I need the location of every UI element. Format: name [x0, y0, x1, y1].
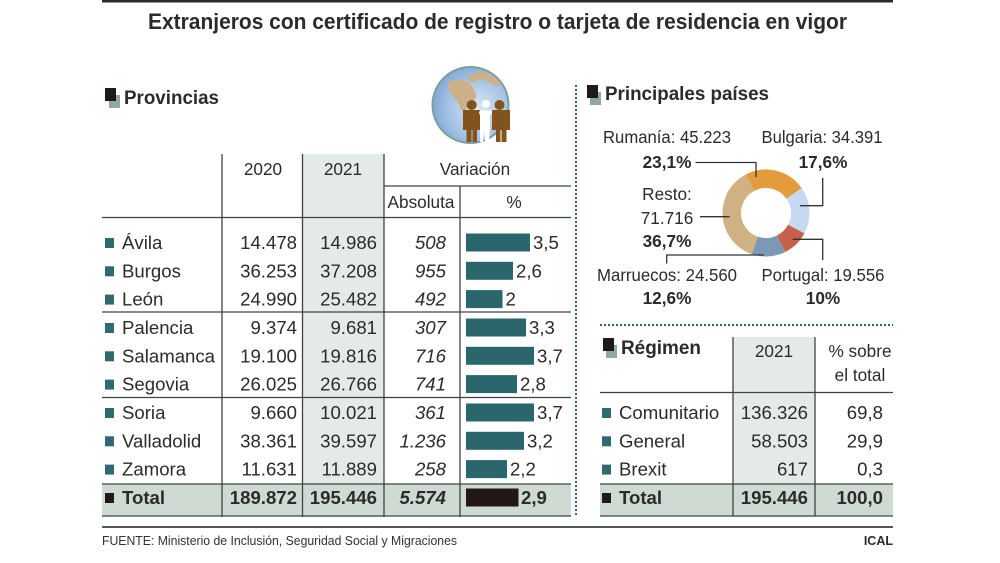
title: Extranjeros con certificado de registro o tarjeta de residencia en vigor — [148, 9, 847, 34]
row: Palencia — [105, 317, 555, 338]
row: Comunitario: 69,8 — [847, 402, 883, 423]
row: Soria: Soria — [122, 402, 166, 423]
row: Total: 189.872 — [230, 487, 297, 508]
row: Salamanca: 19.100 — [240, 345, 297, 366]
row: Brexit: 0,3 — [857, 459, 883, 480]
table header: Variación — [440, 159, 510, 179]
leader lines — [667, 162, 823, 264]
row: Total: 195.446 — [310, 487, 377, 508]
table: provincias — [102, 154, 571, 517]
row: León: 25.482 — [320, 289, 377, 310]
label: Resto: Resto: — [642, 184, 692, 204]
label: Bulgaria: 17,6% — [799, 152, 847, 172]
label: Rumanía: 23,1% — [643, 152, 691, 172]
row: Brexit: Brexit — [619, 459, 667, 480]
row: Soria: 10.021 — [320, 402, 377, 423]
row: Salamanca: 3,7 — [537, 345, 563, 366]
label: Resto: 36,7% — [643, 231, 691, 251]
table header: 2021 — [324, 159, 362, 179]
row: Soria: 361 — [415, 402, 446, 423]
row: Total: Total — [122, 487, 165, 508]
row: Ávila: 14.478 — [240, 232, 297, 253]
row: Segovia: 26.766 — [320, 374, 377, 395]
table header: Absoluta — [388, 192, 455, 212]
row: Salamanca: Salamanca — [122, 345, 216, 366]
row: Comunitario — [602, 402, 883, 423]
row: General: 29,9 — [847, 430, 883, 451]
row: Comunitario: Comunitario — [619, 402, 719, 423]
table header: % sobre — [828, 341, 892, 361]
row: Zamora — [105, 459, 536, 480]
label: Rumanía: Rumanía: 45.223 — [603, 127, 731, 147]
row: Ávila: Ávila — [122, 232, 163, 253]
row: General: General — [619, 430, 685, 451]
row: Palencia: 9.681 — [330, 317, 377, 338]
panel: principales países — [587, 83, 884, 308]
row: Ávila: 508 — [415, 232, 447, 253]
row: León: León — [122, 289, 163, 310]
panel: provincias — [102, 67, 571, 517]
row: Valladolid: 38.361 — [240, 430, 297, 451]
row: Total: 5.574 — [399, 487, 447, 508]
row: León: 492 — [415, 289, 447, 310]
row: Segovia — [105, 374, 546, 395]
row: Comunitario: 136.326 — [741, 402, 808, 423]
row: Segovia: 741 — [415, 374, 446, 395]
row: Soria: 9.660 — [250, 402, 297, 423]
label: Resto: 71.716 — [641, 208, 693, 228]
row: Zamora: 2,2 — [510, 459, 536, 480]
row: Total — [105, 487, 547, 508]
row: Valladolid: Valladolid — [122, 430, 201, 451]
row: Burgos: 36.253 — [240, 260, 297, 281]
row: Salamanca: 716 — [415, 345, 447, 366]
table header: 2020 — [244, 159, 282, 179]
row: Total: 2,9 — [521, 487, 547, 508]
row: Burgos: 2,6 — [516, 260, 542, 281]
row: General: 58.503 — [751, 430, 808, 451]
row: Burgos: Burgos — [122, 260, 181, 281]
table header: % — [506, 192, 522, 212]
panel: régimen — [600, 337, 893, 517]
row: Soria — [105, 402, 563, 423]
source note: FUENTE: Ministerio de Inclusión, Seguridad Social y Migraciones — [102, 534, 457, 548]
row: Salamanca: 19.816 — [320, 345, 377, 366]
row: Burgos — [105, 260, 542, 281]
row: Ávila: 3,5 — [533, 232, 559, 253]
row: Palencia: 9.374 — [250, 317, 297, 338]
row: Salamanca — [105, 345, 563, 366]
icon: left person — [463, 100, 480, 142]
row: Palencia: 3,3 — [529, 317, 555, 338]
label: Rumanía — [603, 127, 731, 172]
row: Zamora: Zamora — [122, 459, 187, 480]
label: Marruecos: 12,6% — [643, 288, 691, 308]
heading: provincias: Provincias — [124, 87, 219, 109]
label: Marruecos: Marruecos: 24.560 — [597, 265, 737, 285]
row: Burgos: 37.208 — [320, 260, 377, 281]
icon: centre person — [479, 100, 492, 142]
row: Valladolid: 3,2 — [527, 430, 553, 451]
row: Soria: 3,7 — [537, 402, 563, 423]
icon: right person — [492, 100, 510, 142]
credit: ICAL — [864, 534, 893, 548]
donut chart — [718, 165, 814, 261]
row: Valladolid: 39.597 — [320, 430, 377, 451]
row: León — [105, 289, 516, 310]
row: Total: 100,0 — [836, 487, 883, 508]
row: Valladolid — [105, 430, 553, 451]
icon: globe with people — [432, 67, 510, 143]
heading: principales países: Principales países — [605, 83, 769, 105]
label: Portugal: 10% — [806, 288, 840, 308]
row: Zamora: 11.631 — [242, 459, 297, 480]
row: Total: Total — [619, 487, 662, 508]
table header — [755, 341, 892, 385]
table header — [244, 159, 522, 212]
label: Portugal — [762, 265, 884, 308]
label: Marruecos — [597, 265, 737, 308]
row: Ávila — [105, 232, 559, 253]
heading: régimen: Régimen — [621, 337, 701, 359]
row: General — [602, 430, 883, 451]
row: Brexit: 617 — [777, 459, 808, 480]
row: Burgos: 955 — [415, 260, 447, 281]
table header: 2021 — [755, 341, 793, 361]
row: Ávila: 14.986 — [320, 232, 377, 253]
row: Zamora: 11.889 — [322, 459, 377, 480]
row: Valladolid: 1.236 — [399, 430, 447, 451]
label: Bulgaria — [762, 127, 882, 172]
row: Brexit — [602, 459, 883, 480]
table header: el total — [835, 365, 885, 385]
row: Zamora: 258 — [414, 459, 447, 480]
row: Palencia: Palencia — [122, 317, 194, 338]
row: Segovia: Segovia — [122, 374, 190, 395]
row: León: 2 — [506, 289, 516, 310]
label: Bulgaria: Bulgaria: 34.391 — [762, 127, 882, 147]
row: Total: 195.446 — [741, 487, 808, 508]
row: Total — [602, 487, 883, 508]
row: Segovia: 26.025 — [240, 374, 297, 395]
row: León: 24.990 — [240, 289, 297, 310]
label: Portugal: Portugal: 19.556 — [762, 265, 884, 285]
label: Resto — [641, 184, 693, 251]
row: Palencia: 307 — [415, 317, 447, 338]
row: Segovia: 2,8 — [520, 374, 546, 395]
